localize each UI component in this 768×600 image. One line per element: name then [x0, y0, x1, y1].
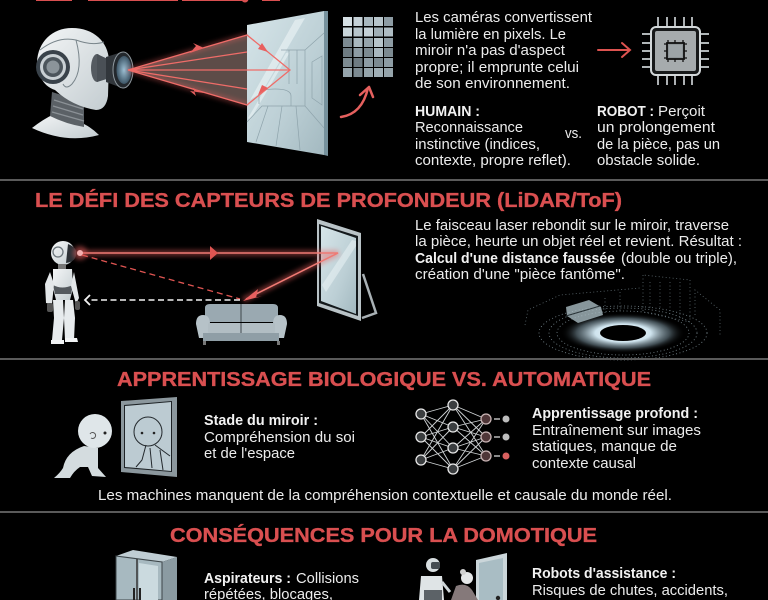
- text: vacuum cleaners: [204, 571, 359, 600]
- icon: mirror with baby reflection: [121, 397, 177, 477]
- arrow: curved to pixel grid: [341, 87, 373, 117]
- section 1 illustration: light beams: [128, 35, 290, 105]
- text: robot: un prolongement: [597, 120, 715, 136]
- text: assistance robots: Risques de chutes, accidents,: [532, 583, 728, 599]
- text: robot: ROBOT :: [597, 104, 654, 120]
- text: camera explanation: [415, 10, 592, 92]
- text: deep learning: Entraînement sur images: [532, 423, 701, 439]
- text: mirror stage: Compréhension du soi: [204, 430, 355, 446]
- text: vacuum cleaners: Aspirateurs :: [204, 571, 291, 587]
- text: deep learning: [532, 406, 701, 472]
- text: robot: obstacle solide.: [597, 153, 700, 169]
- text: camera explanation: Les caméras convertissent: [415, 10, 592, 26]
- text: laser explanation: Le faisceau laser rebondit sur le miroir, traverse: [415, 218, 729, 234]
- heading: biological vs automatic learning: APPRENTISSAGE BIOLOGIQUE VS. AUTOMATIQUE: [117, 369, 651, 391]
- text: robot: de la pièce, pas un: [597, 137, 720, 153]
- text: human: instinctive (indices,: [415, 137, 540, 153]
- text: vacuum cleaners: Collisions: [296, 571, 359, 587]
- text: human: HUMAIN :: [415, 104, 480, 120]
- section 2 illustration: couch: [196, 304, 287, 345]
- text: laser explanation: [415, 218, 742, 283]
- text: camera explanation: propre; il emprunte celui: [415, 60, 579, 76]
- text: mirror stage: [204, 413, 355, 462]
- heading: depth sensors: LE DÉFI DES CAPTEURS DE PROFONDEUR (LiDAR/ToF): [35, 189, 622, 212]
- section 2 illustration: tall mirror: [317, 219, 376, 321]
- clipped heading remnant at top edge: [36, 0, 280, 2]
- text: robot: Perçoit: [658, 104, 705, 120]
- icon: crawling baby: [54, 414, 112, 478]
- section 1 illustration: robot head with camera: [32, 28, 133, 138]
- text: assistance robots: [532, 566, 728, 599]
- text: machines summary: Les machines manquent de la compréhension contextuelle et causale du monde réel.: [98, 488, 672, 504]
- text: human: Reconnaissance: [415, 120, 523, 136]
- section 2 illustration: laser beams: [73, 246, 338, 305]
- section 2 illustration: small robot: [45, 241, 80, 344]
- text: human: [415, 104, 571, 169]
- text: laser explanation: la pièce, heurte un objet réel et revient. Résultat :: [415, 234, 742, 250]
- text: mirror stage: et de l'espace: [204, 446, 295, 462]
- text: deep learning: contexte causal: [532, 456, 636, 472]
- arrow: to chip: [598, 43, 630, 57]
- text: camera explanation: de son environnement.: [415, 76, 570, 92]
- text: laser explanation: Calcul d'une distance faussée: [415, 251, 615, 267]
- icon: mirrored wardrobe: [116, 550, 177, 600]
- text: camera explanation: la lumière en pixels. Le: [415, 27, 566, 43]
- text: mirror stage: Stade du miroir :: [204, 413, 318, 429]
- text: deep learning: Apprentissage profond :: [532, 406, 698, 422]
- text: vs: vs.: [565, 126, 582, 142]
- section 1 illustration: mirror with room reflection: [247, 11, 328, 156]
- text: laser explanation: création d'une "pièce fantôme".: [415, 267, 625, 283]
- text: deep learning: statiques, manque de: [532, 439, 677, 455]
- icon: assistance robot, elderly person and door: [419, 553, 507, 600]
- text: robot: [597, 104, 720, 169]
- icon: pixel grid: [343, 17, 393, 77]
- text: laser explanation: (double ou triple),: [621, 251, 737, 267]
- text: human: contexte, propre reflet).: [415, 153, 571, 169]
- text: assistance robots: Robots d'assistance :: [532, 566, 676, 582]
- heading: home automation consequences: CONSÉQUENCES POUR LA DOMOTIQUE: [170, 524, 597, 547]
- text: camera explanation: miroir n'a pas d'aspect: [415, 43, 565, 59]
- section 2 illustration: lidar point cloud: [525, 275, 720, 360]
- icon: microchip: [642, 17, 709, 85]
- icon: neural network: [416, 400, 510, 474]
